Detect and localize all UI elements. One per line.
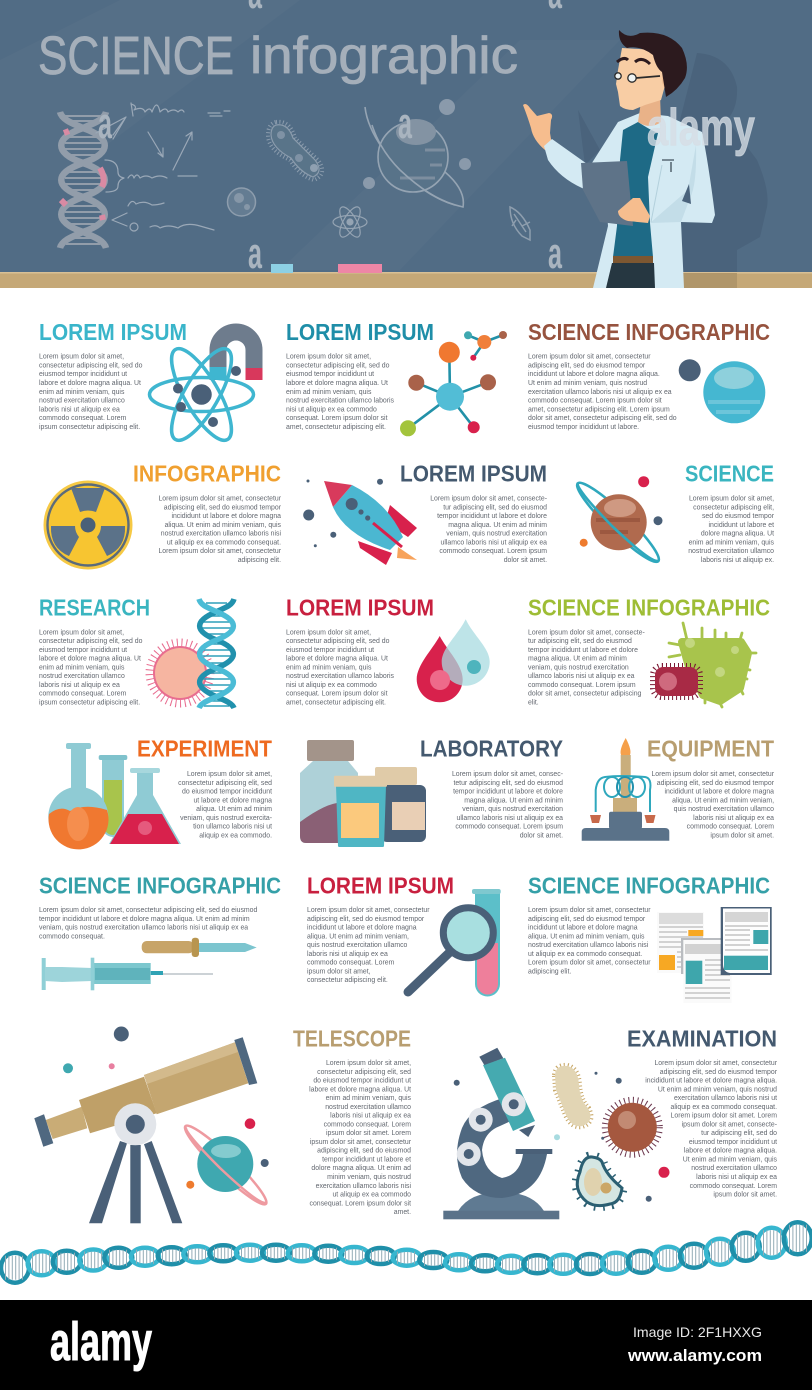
soft board smudges <box>0 0 620 270</box>
panel: equipment burner <box>582 736 775 841</box>
image id: Image ID: 2F1HXXG <box>633 1324 762 1340</box>
text block: laboris nisi ut aliquip ex ea <box>696 1174 777 1181</box>
text block: consequat. Lorem ipsum dolor sit <box>286 691 388 698</box>
text block: Lorem ipsum dolor sit amet, consec- <box>452 771 563 778</box>
text block: incididunt ut labore et dolore magna <box>307 925 417 932</box>
icon: telescope <box>34 1037 257 1223</box>
icon: red bacterium <box>653 666 700 697</box>
chalk cell <box>228 188 256 216</box>
text block: Lorem ipsum dolor sit amet, consecte- <box>528 629 645 636</box>
text block: consectetur adipiscing elit, sed do <box>286 362 390 369</box>
text block: eiusmod tempor incididunt ut labore. <box>528 424 639 431</box>
icon: syringe <box>42 958 213 990</box>
text block: adipiscing elit. <box>238 557 281 564</box>
text block: Lorem ipsum dolor sit amet, <box>326 1060 411 1067</box>
text block: Lorem ipsum dolor sit amet, <box>286 629 371 636</box>
icon: radiation sign <box>44 480 132 570</box>
website: www.alamy.com <box>627 1346 762 1365</box>
icon: microscope <box>443 1048 559 1219</box>
coat pocket pen <box>662 160 674 172</box>
icon: cup jar <box>334 776 387 847</box>
icon: specimen dots <box>454 1072 670 1202</box>
dna strand border <box>1 1222 812 1283</box>
text block: adipiscing elit, sed do eiusmod tempor <box>307 916 425 923</box>
text block: nostrud exercitation ullamco <box>688 548 774 555</box>
teal shirt <box>613 122 658 257</box>
text block: magna aliqua. Ut enim ad minim <box>528 656 627 663</box>
panel: experiment flasks <box>48 736 272 849</box>
icon: dna helix <box>199 599 234 708</box>
text block: labore et dolore magna aliqua. Ut <box>309 1086 411 1093</box>
man shadow on board <box>578 53 768 273</box>
text block: labore et dolore magna aliqua. Ut <box>286 380 388 387</box>
text block: dolore magna aliqua. Ut enim ad <box>311 1165 411 1172</box>
heading: LABORATORY <box>420 736 563 762</box>
icon: planets <box>679 359 765 423</box>
tray top line <box>0 272 812 274</box>
panel: documents <box>528 872 772 1003</box>
text block: consectetur adipiscing elit, sed do <box>39 638 143 645</box>
text block: Lorem ipsum dolor sit amet, consectetur <box>528 960 651 967</box>
panel: radiation infographic <box>44 461 282 570</box>
text block: Ut enim ad minim veniam, quis nostrud <box>658 1086 777 1093</box>
text block: ullamco laboris nisi ut aliquip ex ea <box>457 815 563 822</box>
text block: ullamco laboris nisi ut aliquip ex ea <box>441 539 547 546</box>
text block: commodo consequat. Lorem ipsum <box>528 682 636 689</box>
text block: laboris nisi ut aliquip ex. <box>701 557 774 564</box>
raised hand <box>523 104 552 150</box>
text block: Lorem ipsum dolor sit amet. Lorem <box>671 1113 777 1120</box>
text block: labore et dolore magna aliqua. Ut <box>39 656 141 663</box>
text block: adipiscing elit, sed do eiusmod <box>317 1148 411 1155</box>
text block: enim ad minim veniam, quis <box>689 539 775 546</box>
text block: do eiusmod tempor incididunt <box>182 789 272 796</box>
heading: SCIENCE INFOGRAPHIC <box>528 594 770 620</box>
text block: dolor sit amet, consectetur adipiscing <box>528 691 642 698</box>
text block: veniam, quis nostrud exercitation <box>446 531 547 538</box>
text block: commodo consequat. Lorem <box>690 1183 777 1190</box>
text block: quis nostrud exercitation ullamco <box>307 942 408 949</box>
text block: consectetur adipiscing elit, sed do <box>39 362 143 369</box>
panel: magnifier and tube <box>307 872 501 996</box>
text block: nostrud exercitation ullamco laboris nisi <box>161 531 281 538</box>
icon: dark bottle <box>375 767 426 842</box>
text block: Lorem ipsum dolor sit amet, <box>286 354 371 361</box>
icon: spiky cell <box>150 643 210 703</box>
ear <box>662 71 674 89</box>
chalk atom <box>333 204 367 240</box>
text block: commodo consequat. <box>39 933 105 940</box>
text block: adipiscing elit, sed do eiusmod tempor <box>657 780 775 787</box>
text block: adipiscing elit, sed do eiusmod tempor <box>528 916 646 923</box>
icon: test tube <box>99 755 127 837</box>
text block: tempor incididunt ut labore et dolore <box>453 789 563 796</box>
text block: Ut enim ad minim veniam, quis nostrud <box>528 380 647 387</box>
text block: tur adipiscing elit, sed do <box>701 1130 777 1137</box>
text block: dolor sit amet, consectetur adipiscing elit, sed do <box>528 415 677 422</box>
chalk planet <box>363 99 471 207</box>
text block: minim veniam, quis nostrud <box>327 1174 411 1181</box>
text block: exercitation ullamco laboris nisi ut aliquip ex ea <box>528 389 672 396</box>
text block: commodo consequat. Lorem ipsum <box>455 824 563 831</box>
icon: document sheet <box>657 912 704 973</box>
heading: RESEARCH <box>39 594 150 620</box>
icon: round flask <box>48 743 109 849</box>
text block: commodo consequat. Lorem <box>687 824 774 831</box>
text block: incididunt ut labore et dolore magna <box>664 789 774 796</box>
text block: tur adipiscing elit, sed do eiusmod <box>528 638 632 645</box>
heading: TELESCOPE <box>293 1026 411 1052</box>
text block: dolor sit amet. <box>520 832 563 839</box>
text block: veniam, quis nostrud exercitation ullamco laboris nisi ut aliquip ex ea <box>39 925 248 932</box>
text block: commodo consequat. Lorem <box>307 960 395 967</box>
text block: veniam, quis nostrud exercitation <box>462 806 563 813</box>
panel: planets science infographic <box>528 319 770 431</box>
text block: eiusmod tempor incididunt ut <box>39 371 127 378</box>
icon: atom <box>150 341 254 448</box>
text block: sed do eiusmod tempor <box>702 513 775 520</box>
hand on clipboard <box>618 198 650 223</box>
text block: consectetur adipiscing elit, sed <box>317 1069 411 1076</box>
title word: infographic: infographic <box>250 27 518 85</box>
text block: ut aliquip ex ea commodo consequat. <box>528 951 642 958</box>
text block: aliquip ex ea commodo consequat. <box>670 1104 777 1111</box>
text block: incididunt ut labore et dolore magna aliqua. <box>528 371 660 378</box>
text block: labore et dolore magna aliqua. Ut <box>39 380 141 387</box>
text block: tempor incididunt ut labore et dolore magna aliqua. Ut enim ad minim <box>39 916 250 923</box>
text block: tempor incididunt ut labore et dolore <box>528 647 638 654</box>
text block: amet. <box>394 1209 411 1216</box>
heading: LOREM IPSUM <box>400 461 547 487</box>
text block: labore et dolore magna aliqua. Ut <box>286 656 388 663</box>
alamy logo: alamy <box>50 1312 152 1372</box>
text block: ipsum dolor sit amet. <box>710 832 774 839</box>
text block: adipiscing elit. <box>528 968 571 975</box>
face <box>616 48 666 110</box>
text block: Lorem ipsum dolor sit amet, <box>187 771 272 778</box>
panel: molecule <box>286 319 507 436</box>
panel: rocket <box>303 461 547 565</box>
text block: tempor incididunt ut labore et <box>322 1156 411 1163</box>
icon: second sheet <box>681 938 733 1003</box>
text block: quis nostrud exercitation ullamco <box>674 806 774 813</box>
text block: ipsum dolor sit amet, consecte- <box>682 1121 777 1128</box>
text block: Lorem ipsum dolor sit amet, consectetur <box>654 1060 778 1067</box>
text block: veniam, quis nostrud exercita- <box>180 815 272 822</box>
text block: Lorem ipsum dolor sit amet, consectetur <box>651 771 775 778</box>
panel: research dna <box>39 594 234 708</box>
icon: teal ringed planet and dots <box>63 1026 272 1210</box>
text block: tetur adipiscing elit, sed do eiusmod <box>453 780 563 787</box>
panel: science ringed planet <box>571 461 775 568</box>
text block: magna aliqua. Ut enim ad minim <box>448 522 547 529</box>
panel: syringe and dropper <box>39 872 281 990</box>
neck <box>638 95 661 126</box>
text block: aliqua. Ut enim ad minim veniam, <box>307 933 409 940</box>
watermark a: a <box>248 229 262 278</box>
text block: enim ad minim veniam, quis <box>286 664 372 671</box>
text block: ut aliquip ex ea commodo <box>332 1192 411 1199</box>
text block: nostrud exercitation ullamco <box>691 1165 777 1172</box>
text block: nisi ut aliquip ex ea commodo <box>286 682 377 689</box>
scientist <box>523 30 715 288</box>
heading: EXPERIMENT <box>137 736 272 762</box>
icon: clipboard <box>721 907 772 975</box>
text block: magna aliqua. Ut enim ad minim <box>464 797 563 804</box>
text block: consequat. Lorem ipsum dolor sit <box>310 1200 411 1207</box>
text block: incididunt ut labore et dolore magna <box>171 513 281 520</box>
text block: Lorem ipsum dolor sit amet, <box>39 629 124 636</box>
panel: footer bar <box>0 1300 812 1390</box>
panel: bacteria <box>528 594 770 707</box>
heading: EXAMINATION <box>627 1026 777 1052</box>
text block: Lorem ipsum dolor sit amet, consectetur <box>528 907 651 914</box>
heading: LOREM IPSUM <box>286 594 434 620</box>
pink eraser <box>338 264 382 273</box>
watermark letters <box>98 0 562 278</box>
text block: amet, consectetur adipiscing elit. Lorem ipsum <box>528 406 670 413</box>
eyebrows <box>617 58 650 64</box>
trousers <box>606 263 655 288</box>
text block: eiusmod tempor incididunt ut <box>286 647 374 654</box>
text block: nostrud exercitation ullamco laboris <box>286 398 395 405</box>
text block: exercitation ullamco laboris nisi <box>316 1183 411 1190</box>
text block: ipsum dolor sit amet, <box>307 968 371 975</box>
icon: dropper <box>142 938 257 957</box>
text block: Lorem ipsum dolor sit amet, consectetur <box>158 548 282 555</box>
text block: commodo consequat. Lorem ipsum <box>439 548 547 555</box>
text block: incididunt ut labore et dolore magna <box>528 925 638 932</box>
text block: Lorem ipsum dolor sit amet, <box>689 496 774 502</box>
text block: exercitation ullamco laboris nisi ut <box>674 1095 777 1102</box>
text block: consectetur adipiscing elit. <box>307 977 388 984</box>
hair <box>619 30 687 97</box>
shadow on tray <box>680 273 737 288</box>
title <box>38 26 518 86</box>
text block: commodo consequat. Lorem <box>39 415 127 422</box>
chalk handwriting notes <box>96 103 230 231</box>
blue eraser <box>271 264 293 273</box>
text block: adipiscing elit, sed do eiusmod tempor <box>528 362 646 369</box>
text block: aliqua. Ut enim ad minim veniam, <box>672 797 774 804</box>
text block: incididunt ut labore et dolore magna aliqua. <box>645 1078 777 1085</box>
text block: Lorem ipsum dolor sit amet, consectetur <box>528 354 651 361</box>
text block: ipsum dolor sit amet, consectetur <box>310 1139 412 1146</box>
text block: commodo consequat. Lorem <box>324 1121 411 1128</box>
text block: nostrud exercitation ullamco <box>325 1104 411 1111</box>
text block: aliqua. Ut enim ad minim veniam, quis <box>528 933 645 940</box>
chalk rocket <box>510 207 530 240</box>
text block: laboris nisi ut aliquip ex ea <box>330 1113 411 1120</box>
text block: consectetur adipiscing elit, sed do <box>286 638 390 645</box>
text block: enim ad minim veniam, quis <box>39 664 125 671</box>
text block: dolore magna aliqua. Ut <box>701 531 774 538</box>
text block: ullamco laboris nisi ut aliquip ex ea <box>528 673 635 680</box>
text block: nisi ut aliquip ex ea commodo <box>286 406 377 413</box>
icon: green bacterium <box>669 623 756 707</box>
panel: atom and magnet <box>39 319 262 448</box>
text block: Lorem ipsum dolor sit amet, consecte- <box>430 496 547 502</box>
text block: commodo consequat. Lorem ipsum dolor sit <box>528 398 662 405</box>
text block: aliqua. Ut enim ad minim <box>196 806 272 813</box>
heading: SCIENCE <box>685 461 774 487</box>
text block: elit. <box>528 699 539 706</box>
text block: labore et dolore magna aliqua. <box>684 1148 777 1155</box>
text block: adipiscing elit, sed do eiusmod tempor <box>660 1069 778 1076</box>
text block: do eiusmod tempor incididunt ut <box>313 1078 411 1085</box>
icon: teal bacterium <box>577 1157 622 1206</box>
alamy watermark: alamy <box>647 99 755 157</box>
text block: eiusmod tempor incididunt ut <box>689 1139 777 1146</box>
gap between body and sleeve <box>682 184 691 204</box>
coat shading <box>650 145 696 223</box>
chalk tray <box>0 272 812 288</box>
text block: tempor incididunt ut labore et dolore <box>437 513 547 520</box>
icon: test tube <box>472 889 501 996</box>
icon: magnifying glass <box>408 908 493 992</box>
text block: consectetur adipiscing elit, sed <box>178 780 272 787</box>
glasses <box>615 73 660 82</box>
heading: SCIENCE INFOGRAPHIC <box>528 319 770 345</box>
text block: nostrud exercitation ullamco laboris nisi <box>528 942 649 949</box>
text block: ipsum dolor sit amet. Lorem <box>326 1130 411 1137</box>
text block: consequat. Lorem ipsum dolor sit <box>286 415 388 422</box>
watermark a: a <box>398 99 412 148</box>
icon: brown virus <box>605 1100 659 1154</box>
panel: laboratory bottles <box>300 736 563 847</box>
text block: nostrud exercitation ullamco laboris <box>286 673 395 680</box>
text block: tion ullamco laboris nisi ut <box>193 824 272 831</box>
text block: enim ad minim veniam, quis <box>39 389 125 396</box>
text block: eiusmod tempor incididunt ut <box>39 647 127 654</box>
text block: commodo consequat. Lorem <box>39 691 127 698</box>
panel: chalkboard header <box>0 0 812 288</box>
text block: adipiscing elit, sed do eiusmod tempor <box>164 504 282 511</box>
title word: science: SCIENCE <box>38 26 234 86</box>
text block: Lorem ipsum dolor sit amet, <box>39 354 124 361</box>
text block: laboris nisi ut aliquip ex ea <box>693 815 774 822</box>
text block: amet, consectetur adipiscing elit. <box>286 699 386 706</box>
panel: telescope <box>34 1026 412 1223</box>
belt <box>613 256 653 264</box>
text block: enim ad minim veniam, quis <box>326 1095 412 1102</box>
text block: laboris nisi ut aliquip ex ea <box>307 951 388 958</box>
heading: EQUIPMENT <box>647 736 774 762</box>
heading: SCIENCE INFOGRAPHIC <box>39 872 281 898</box>
text block: enim ad minim veniam, quis <box>286 389 372 396</box>
text block: ut aliquip ex ea commodo consequat. <box>167 539 281 546</box>
text block: aliquip ex ea commodo. <box>199 832 272 839</box>
panel: blood drops <box>286 594 490 706</box>
heading: LOREM IPSUM <box>307 872 454 898</box>
text block: veniam, quis nostrud exercitation <box>528 664 629 671</box>
watermark a: a <box>548 229 562 278</box>
icon: magnet <box>210 332 262 380</box>
icon: ringed planet <box>571 476 665 568</box>
text block: Ut enim ad minim veniam, quis <box>683 1156 778 1163</box>
heading: SCIENCE INFOGRAPHIC <box>528 872 770 898</box>
text block: nostrud exercitation ullamco <box>39 673 125 680</box>
icon: burner <box>582 738 669 841</box>
text block: consectetur adipiscing elit, <box>693 504 774 511</box>
text block: Lorem ipsum dolor sit amet, consectetur <box>158 496 282 502</box>
footer background <box>0 1300 812 1390</box>
text block: ipsum consectetur adipiscing elit. <box>39 699 140 706</box>
text block: laboris nisi ut aliquip ex ea <box>39 682 120 689</box>
icon: large jar <box>300 740 358 843</box>
heading: LOREM IPSUM <box>286 319 434 345</box>
icon: erlenmeyer flask <box>109 768 181 844</box>
text block: incididunt ut labore et <box>708 522 774 529</box>
chalkboard surface <box>0 0 812 273</box>
text block: amet, consectetur adipiscing elit. <box>286 424 386 431</box>
text block: Lorem ipsum dolor sit amet, consectetur adipiscing elit, sed do eiusmod <box>39 907 257 914</box>
lapel line <box>651 165 662 222</box>
heading: LOREM IPSUM <box>39 319 187 345</box>
text block: ut labore et dolore magna <box>193 797 272 804</box>
chalk bacterium <box>268 122 322 180</box>
chalk dna <box>60 112 106 248</box>
watermark a: a <box>98 99 112 148</box>
heading: INFOGRAPHIC <box>133 461 281 487</box>
text block: tur adipiscing elit, sed do eiusmod <box>443 504 547 511</box>
panel: examination microscope <box>443 1026 778 1219</box>
text block: aliqua. Ut enim ad minim veniam, quis <box>165 522 282 529</box>
icon: drops <box>417 619 490 702</box>
icon: tan bacterium <box>555 1066 590 1126</box>
icon: molecule <box>400 331 507 436</box>
text block: ipsum dolor sit amet. <box>713 1192 777 1199</box>
icon: rocket <box>303 479 417 565</box>
text block: Lorem ipsum dolor sit amet, consectetur <box>307 907 430 914</box>
text block: laboris nisi ut aliquip ex ea <box>39 406 120 413</box>
text block: dolor sit amet. <box>504 557 547 564</box>
text block: nostrud exercitation ullamco <box>39 398 125 405</box>
text block: eiusmod tempor incididunt ut <box>286 371 374 378</box>
text block: ipsum consectetur adipiscing elit. <box>39 424 140 431</box>
clipboard <box>581 161 633 226</box>
coat and sleeve <box>544 113 715 288</box>
